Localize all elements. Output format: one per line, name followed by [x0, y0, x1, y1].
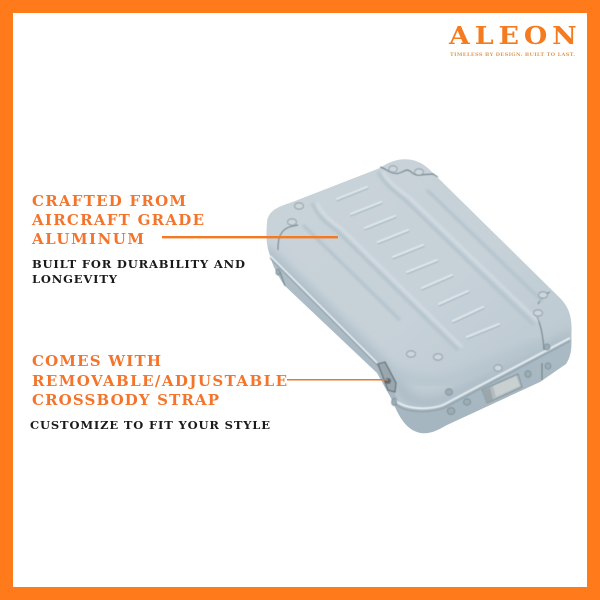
text block: aluminum heading: ALUMINUM — [31, 230, 144, 248]
case lower body — [268, 245, 571, 433]
callout line: strap — [287, 379, 388, 380]
text block: strap heading — [32, 352, 287, 409]
seam line — [270, 256, 570, 408]
text block: durability: BUILT FOR DURABILITY AND — [32, 257, 245, 271]
corner plate seams — [278, 167, 550, 380]
brand logo: TIMELESS BY DESIGN. BUILT TO LAST. — [450, 52, 575, 58]
long body ribs — [303, 172, 543, 350]
callout line: aluminum — [162, 236, 338, 238]
raised ribs on lid — [337, 187, 499, 338]
brand logo: ALEON — [448, 22, 577, 51]
combination lock — [482, 374, 522, 403]
text block: durability — [32, 257, 245, 286]
lower rivets — [276, 269, 551, 414]
product: aluminum case — [262, 159, 575, 433]
text block: strap heading: COMES WITH — [32, 352, 161, 370]
rivets — [288, 166, 548, 371]
text block: durability: LONGEVITY — [32, 272, 118, 286]
text block: strap heading: CROSSBODY STRAP — [32, 391, 219, 409]
text block: strap heading: REMOVABLE/ADJUSTABLE — [32, 372, 287, 390]
case top face — [266, 159, 572, 409]
text block: customize: CUSTOMIZE TO FIT YOUR STYLE — [30, 418, 270, 432]
text block: aluminum heading: AIRCRAFT GRADE — [31, 211, 204, 229]
lid edge shading — [262, 250, 575, 403]
text block: aluminum heading: CRAFTED FROM — [32, 192, 186, 210]
strap buckle — [378, 362, 396, 392]
text block: aluminum heading — [31, 192, 204, 248]
